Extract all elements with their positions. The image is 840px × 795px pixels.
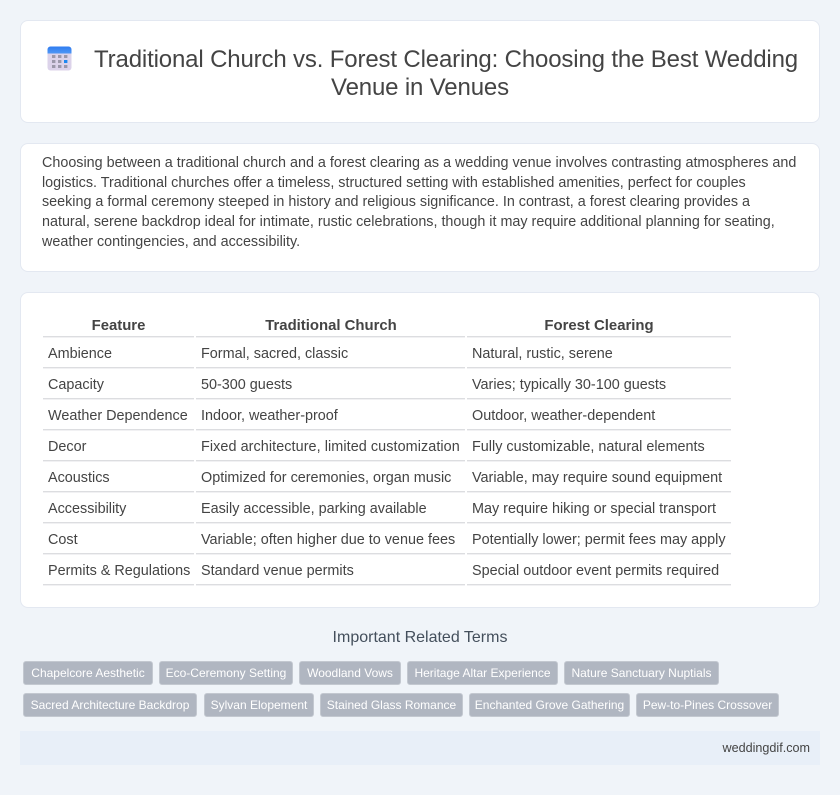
comparison table: May require hiking or special transport: [472, 501, 716, 517]
comparison table: Cost: [48, 532, 78, 548]
title: Venue in Venues: [331, 74, 509, 101]
related terms heading: Important Related Terms: [333, 629, 507, 646]
comparison table: Variable, may require sound equipment: [472, 470, 722, 486]
comparison table: Standard venue permits: [201, 563, 354, 579]
comparison table: Accessibility: [48, 501, 126, 517]
related term tags: Sylvan Elopement: [211, 698, 307, 712]
comparison table: Easily accessible, parking available: [201, 501, 427, 517]
icon: calendar: [48, 46, 72, 70]
comparison table: Natural, rustic, serene: [472, 346, 613, 362]
comparison table: Acoustics: [48, 470, 110, 486]
intro text: natural, serene backdrop ideal for intimate, rustic celebrations, though it may require additional planning for seating,: [42, 214, 775, 230]
related term tags: Enchanted Grove Gathering: [475, 698, 624, 712]
comparison table: Variable; often higher due to venue fees: [201, 532, 455, 548]
intro text: weather contingencies, and accessibility.: [42, 234, 300, 250]
table panel: [20, 292, 820, 608]
comparison table: Optimized for ceremonies, organ music: [201, 470, 451, 486]
related term tags: Pew-to-Pines Crossover: [643, 698, 772, 712]
intro text: Choosing between a traditional church and a forest clearing as a wedding venue involves contrasting atmospheres and: [42, 155, 796, 171]
footer bar: [20, 731, 820, 765]
comparison table: Feature: [92, 318, 145, 334]
related term tags: Heritage Altar Experience: [414, 666, 551, 680]
intro text: seeking a formal ceremony steeped in history and religious significance. In contrast, a forest clearing provides a: [42, 194, 750, 210]
comparison table: Potentially lower; permit fees may apply: [472, 532, 726, 548]
related term tags: Chapelcore Aesthetic: [31, 666, 145, 680]
intro text: [42, 155, 796, 250]
comparison table: Fixed architecture, limited customization: [201, 439, 460, 455]
related term tags: Nature Sanctuary Nuptials: [571, 666, 712, 680]
comparison table: Weather Dependence: [48, 408, 188, 424]
related term tags: Sacred Architecture Backdrop: [31, 698, 189, 712]
related term tags: [23, 661, 779, 717]
comparison table: Varies; typically 30-100 guests: [472, 377, 666, 393]
comparison table: Permits & Regulations: [48, 563, 190, 579]
header card: [20, 20, 820, 123]
footer credit: weddingdif.com: [722, 741, 810, 755]
comparison table: Capacity: [48, 377, 104, 393]
related term tags: Eco-Ceremony Setting: [166, 666, 286, 680]
comparison table: Traditional Church: [265, 318, 397, 334]
title: Traditional Church vs. Forest Clearing: Choosing the Best Wedding: [94, 46, 798, 73]
comparison table: [43, 318, 731, 586]
comparison table: Fully customizable, natural elements: [472, 439, 705, 455]
comparison table: 50-300 guests: [201, 377, 292, 393]
comparison table: Ambience: [48, 346, 112, 362]
comparison table: Outdoor, weather-dependent: [472, 408, 655, 424]
intro text: logistics. Traditional churches offer a timeless, structured setting with established amenities, perfect for couples: [42, 175, 746, 191]
related term tags: Woodland Vows: [307, 666, 393, 680]
comparison table: Indoor, weather-proof: [201, 408, 338, 424]
comparison table: Decor: [48, 439, 86, 455]
intro panel: [20, 143, 820, 272]
comparison table: Formal, sacred, classic: [201, 346, 348, 362]
comparison table: Special outdoor event permits required: [472, 563, 719, 579]
comparison table: Forest Clearing: [544, 318, 654, 334]
title: [94, 46, 798, 101]
related term tags: Stained Glass Romance: [327, 698, 456, 712]
